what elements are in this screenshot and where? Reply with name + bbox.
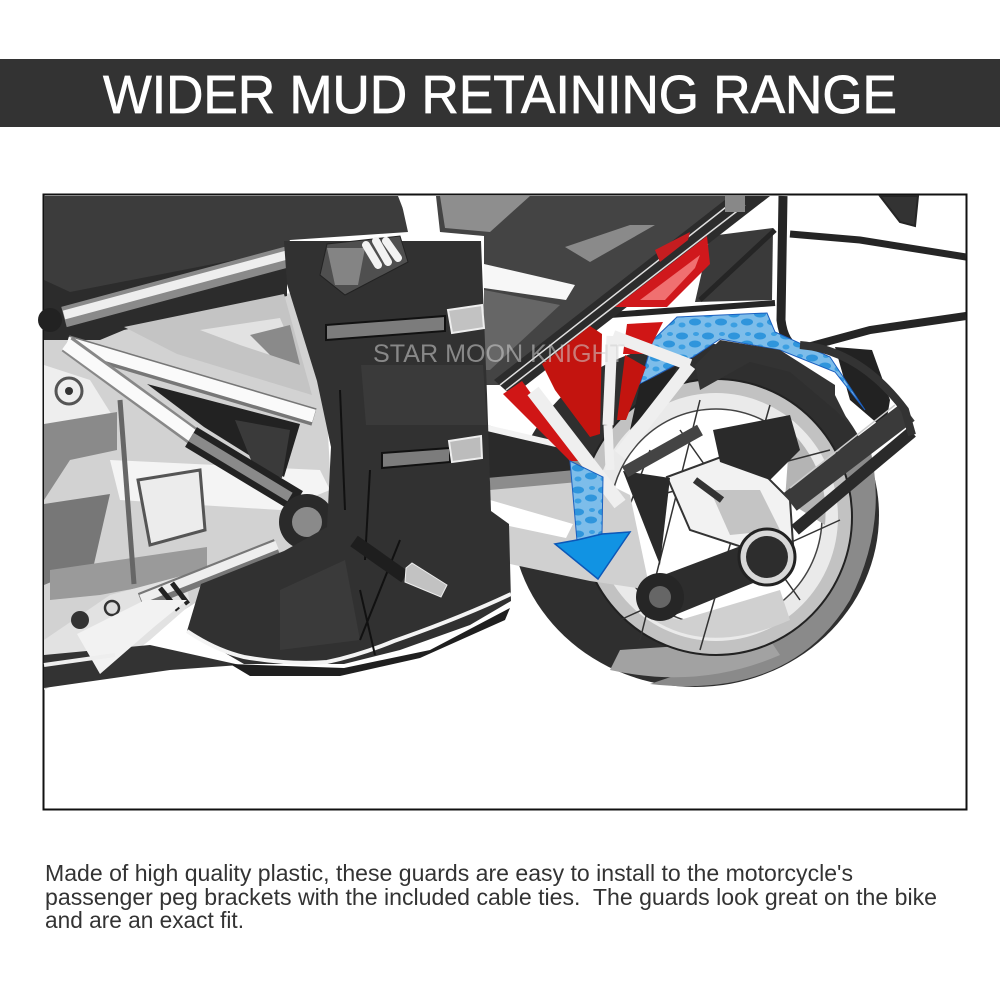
boot [187, 236, 511, 676]
boot straps and buckles [326, 305, 484, 597]
rear tyre [511, 343, 890, 687]
rear fender black [695, 340, 850, 425]
rear wheel rim [580, 379, 852, 655]
inner frame triangle [695, 228, 773, 302]
swingarm and final drive [487, 415, 800, 590]
footpeg and bracket [44, 545, 277, 688]
white gap behind boot [398, 196, 440, 232]
luggage rack [610, 196, 966, 350]
description text: passenger peg brackets with the included cable ties. The guards look great on the bike [45, 884, 937, 910]
shock absorber rod [191, 437, 335, 550]
red guard pieces [503, 232, 710, 461]
description text: and are an exact fit. [45, 907, 244, 933]
blue arrow [555, 461, 630, 579]
description text [45, 860, 937, 933]
mudguard: blue mottled [640, 313, 865, 410]
torque arm and axle [636, 529, 795, 621]
description text: Made of high quality plastic, these guards are easy to install to the motorcycle's [45, 860, 853, 886]
dark bodywork upper left [44, 196, 408, 292]
engine and side casing [44, 244, 335, 690]
watermark: STAR MOON KNIGHT [373, 340, 625, 368]
frame tubes [38, 255, 314, 437]
photo panel: motorcycle rear with boot and mud guards [38, 194, 966, 810]
dark gap under bracket [630, 366, 677, 430]
seat and rear bodywork [436, 196, 740, 385]
diagonal subframe tube [494, 196, 770, 396]
title banner: WIDER MUD RETAINING RANGE [103, 65, 897, 125]
crash bar [790, 345, 912, 530]
white triangular peg bracket [533, 336, 690, 504]
